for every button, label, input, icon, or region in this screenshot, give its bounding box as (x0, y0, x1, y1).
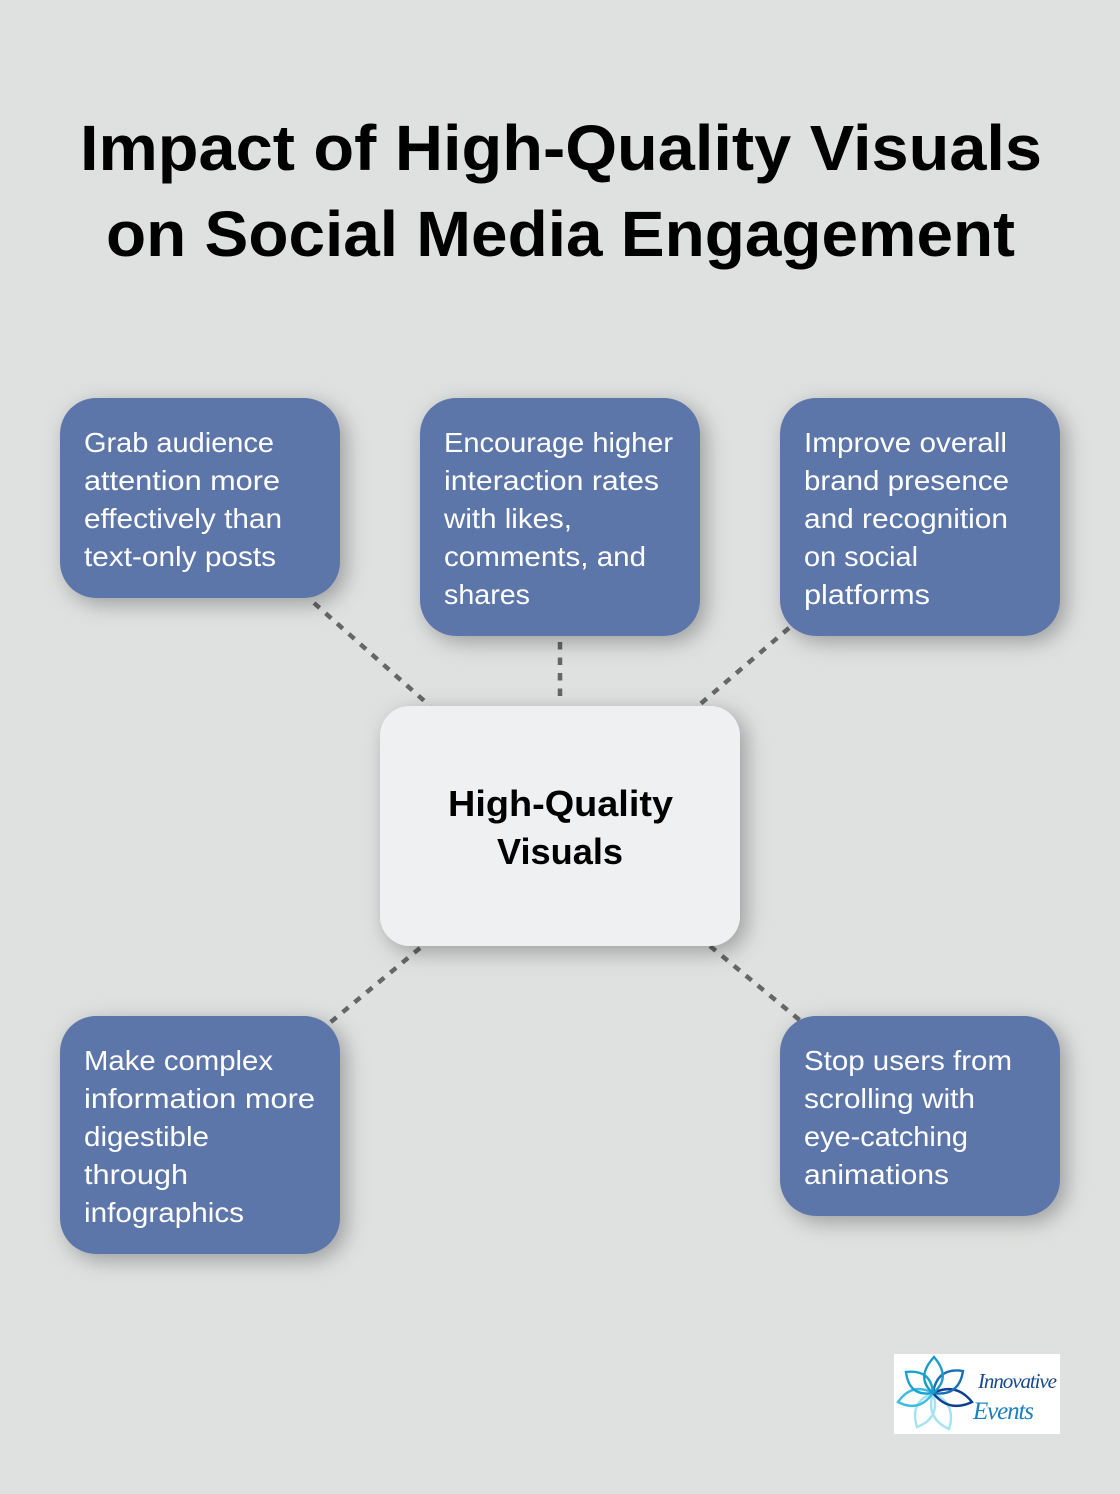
panel: grab audience attention: text-only posts (84, 541, 276, 572)
panel: stop scrolling: eye-catching (804, 1121, 968, 1152)
panel: brand presence: brand presence (804, 465, 1009, 496)
panel: center hub: High-Quality (448, 783, 673, 824)
title: Impact of High-Quality Visuals (80, 112, 1042, 184)
panel: complex information: through (84, 1159, 188, 1190)
panel: grab audience attention (60, 398, 340, 598)
panel: grab audience attention: effectively than (84, 503, 282, 534)
connector: top middle card to center (558, 642, 562, 700)
panel: complex information (60, 1016, 340, 1254)
panel: encourage interaction: shares (444, 579, 530, 610)
connector: top right card to center (698, 628, 789, 706)
panel: brand presence: on social (804, 541, 918, 572)
panel: grab audience attention: attention more (84, 465, 280, 496)
panel: complex information: information more (84, 1083, 315, 1114)
logo: Innovative Events: Innovative (977, 1369, 1057, 1393)
connector: bottom left card to center (326, 948, 420, 1026)
panel: encourage interaction (420, 398, 700, 636)
connector: top left card to center (314, 603, 430, 706)
icon: lotus flower (898, 1357, 972, 1429)
logo: Innovative Events (894, 1354, 1060, 1434)
title (80, 112, 1042, 270)
panel: center hub: Visuals (497, 831, 623, 872)
panel: stop scrolling: scrolling with (804, 1083, 975, 1114)
panel: encourage interaction: with likes, (443, 503, 572, 534)
panel: brand presence: and recognition (804, 503, 1008, 534)
panel: stop scrolling (780, 1016, 1060, 1216)
panel: complex information: infographics (84, 1197, 244, 1228)
title: on Social Media Engagement (106, 198, 1015, 270)
panel: encourage interaction: interaction rates (444, 465, 659, 496)
panel: complex information: Make complex (84, 1045, 273, 1076)
panel: center hub (380, 706, 740, 946)
panel: grab audience attention: Grab audience (84, 427, 274, 458)
connector: bottom right card to center (710, 946, 802, 1022)
panel: complex information: digestible (84, 1121, 209, 1152)
panel: encourage interaction: comments, and (444, 541, 646, 572)
logo: Innovative Events: Events (972, 1398, 1034, 1425)
panel: stop scrolling: Stop users from (804, 1045, 1012, 1076)
panel: stop scrolling: animations (804, 1159, 949, 1190)
panel: brand presence (780, 398, 1060, 636)
panel: brand presence: platforms (804, 579, 930, 610)
panel: brand presence: Improve overall (804, 427, 1007, 458)
panel: encourage interaction: Encourage higher (444, 427, 673, 458)
